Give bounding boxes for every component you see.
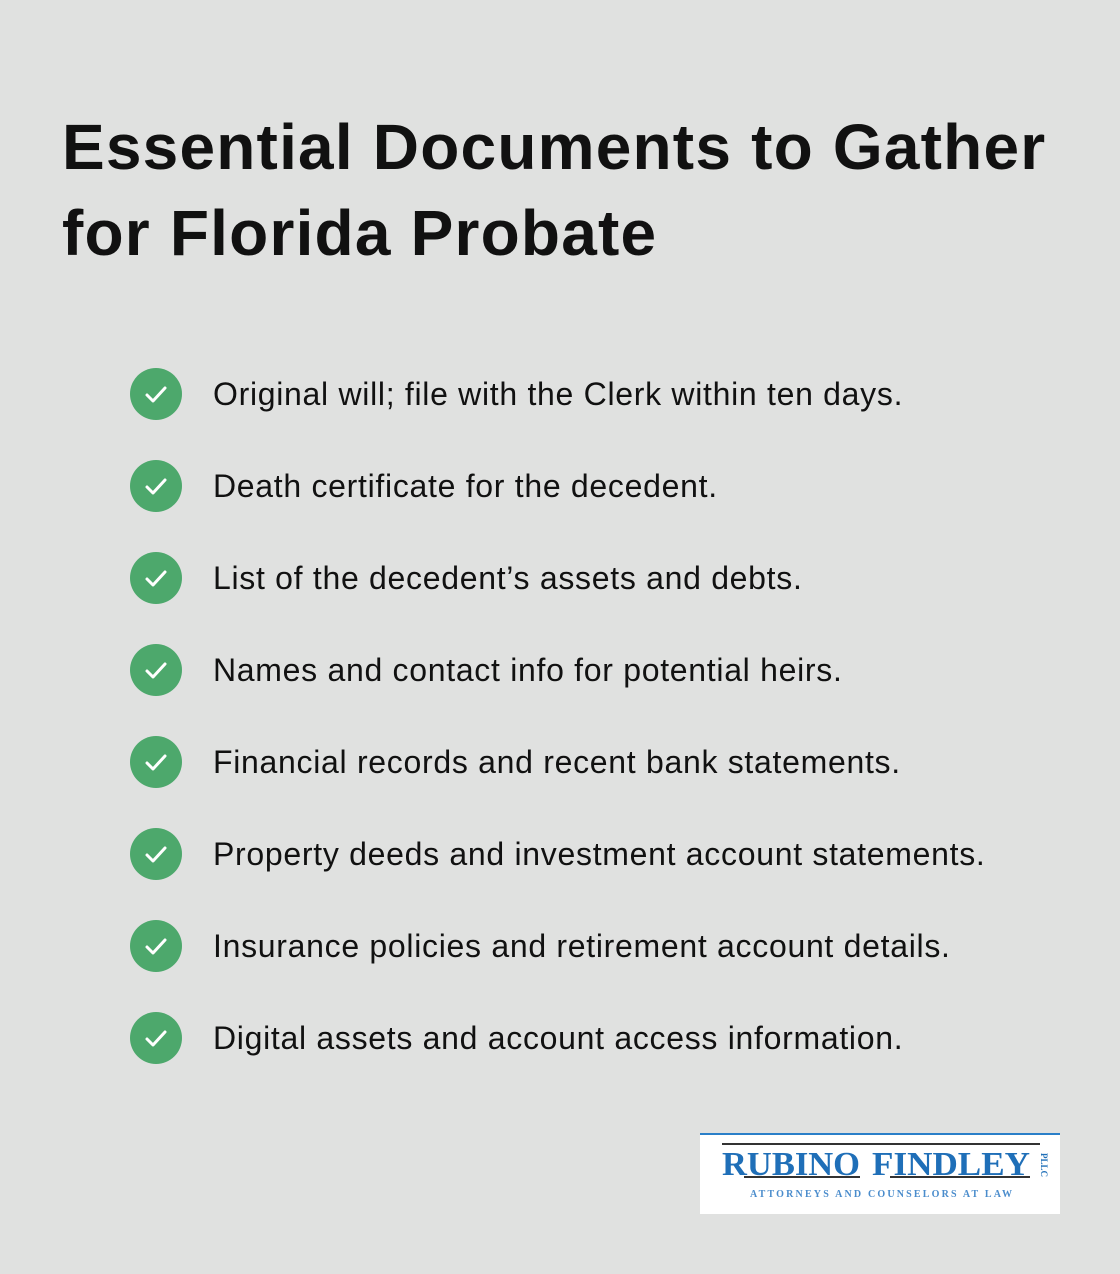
item 7 [130, 920, 951, 972]
item 7: Insurance policies and retirement account details. [213, 928, 951, 964]
item 4 [130, 644, 843, 696]
item 2 [130, 460, 718, 512]
item 1 [130, 368, 903, 420]
item 3: List of the decedent’s assets and debts. [213, 560, 803, 596]
logo [700, 1133, 1060, 1214]
item 6: Property deeds and investment account statements. [213, 836, 986, 872]
item 4: Names and contact info for potential heirs. [213, 652, 843, 688]
checklist [130, 368, 986, 1064]
logo: PLLC [1039, 1153, 1049, 1177]
item 5: Financial records and recent bank statements. [213, 744, 901, 780]
logo: FINDLEY [872, 1146, 1030, 1183]
logo: ATTORNEYS AND COUNSELORS AT LAW [750, 1189, 1012, 1200]
logo: RUBINO [722, 1146, 860, 1183]
item 3 [130, 552, 803, 604]
item 5 [130, 736, 901, 788]
item 1: Original will; file with the Clerk within ten days. [213, 376, 903, 412]
item 2: Death certificate for the decedent. [213, 468, 718, 504]
item 6 [130, 828, 986, 880]
title [62, 111, 1046, 269]
title: Essential Documents to Gather [62, 111, 1046, 183]
title: for Florida Probate [62, 197, 657, 269]
item 8: Digital assets and account access information. [213, 1020, 903, 1056]
item 8 [130, 1012, 903, 1064]
